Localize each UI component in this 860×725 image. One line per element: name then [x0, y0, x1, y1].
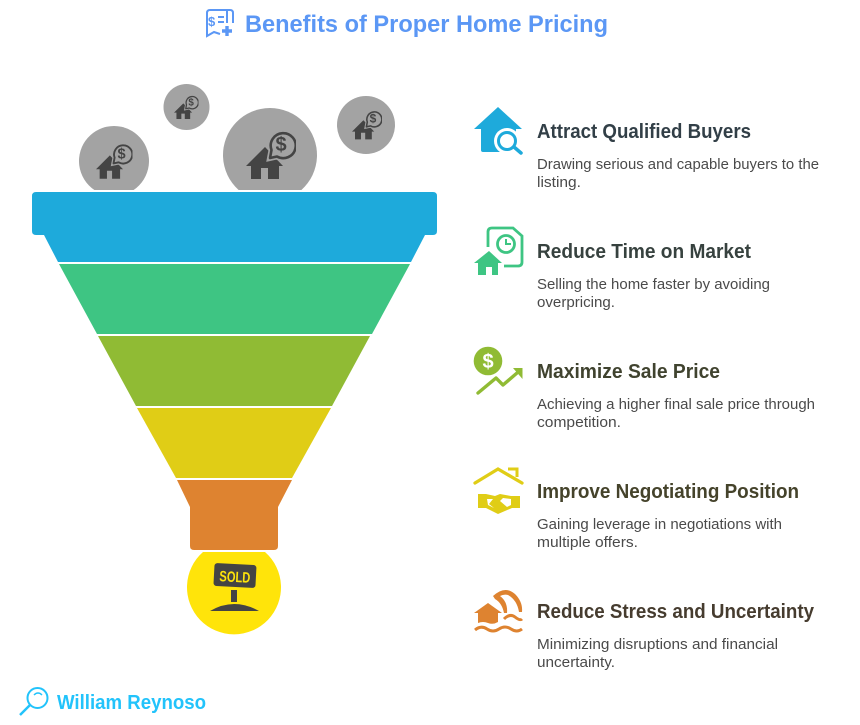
heading: Attract Qualified Buyers	[537, 121, 751, 143]
heading: Reduce Stress and Uncertainty	[537, 601, 815, 623]
heading: Reduce Time on Market	[537, 241, 751, 263]
title text: Benefits of Proper Home Pricing	[245, 11, 608, 38]
icon: receipt with plus: $	[208, 14, 216, 29]
circle: house 3	[223, 108, 317, 190]
title	[207, 10, 608, 38]
item: attract qualified buyers	[474, 107, 819, 191]
heading: Improve Negotiating Position	[537, 481, 799, 503]
icon: magnifier	[20, 688, 48, 715]
author name: William Reynoso	[57, 692, 206, 714]
description: competition.	[537, 415, 621, 431]
description: Achieving a higher final sale price through	[537, 397, 815, 413]
description: Minimizing disruptions and financial	[537, 637, 778, 653]
funnel	[32, 192, 437, 634]
icon: dollar coin with rising arrow: $	[482, 351, 494, 373]
sold sign circle	[187, 552, 281, 634]
icon: receipt with plus	[207, 10, 233, 36]
description: Gaining leverage in negotiations with	[537, 517, 782, 533]
author credit	[20, 688, 206, 715]
funnel section: yellow	[137, 408, 331, 478]
description: Selling the home faster by avoiding	[537, 277, 770, 293]
circle: house 4	[337, 96, 395, 154]
funnel section: green	[59, 264, 410, 334]
item: reduce time on market	[474, 228, 770, 311]
icon: house with clock page	[474, 228, 522, 275]
item: improve negotiating position	[475, 469, 799, 551]
funnel section: blue	[32, 192, 437, 262]
item: reduce stress and uncertainty	[474, 590, 815, 671]
icon: dollar coin with rising arrow	[474, 347, 522, 393]
circle: house 2	[164, 84, 210, 130]
icon: house in waves	[474, 590, 522, 631]
description: overpricing.	[537, 295, 615, 311]
description: Drawing serious and capable buyers to the	[537, 157, 819, 173]
circle: house 1	[79, 126, 149, 190]
description: uncertainty.	[537, 655, 615, 671]
description: listing.	[537, 175, 581, 191]
heading: Maximize Sale Price	[537, 361, 720, 383]
funnel section: olive	[98, 336, 370, 406]
gray house circles	[79, 84, 395, 190]
item: maximize sale price	[474, 347, 815, 431]
sold sign circle: SOLD	[219, 568, 251, 587]
icon: house roof with handshake	[475, 469, 522, 514]
funnel section: orange	[177, 480, 292, 550]
icon: house with magnifier	[474, 107, 525, 156]
description: multiple offers.	[537, 535, 638, 551]
